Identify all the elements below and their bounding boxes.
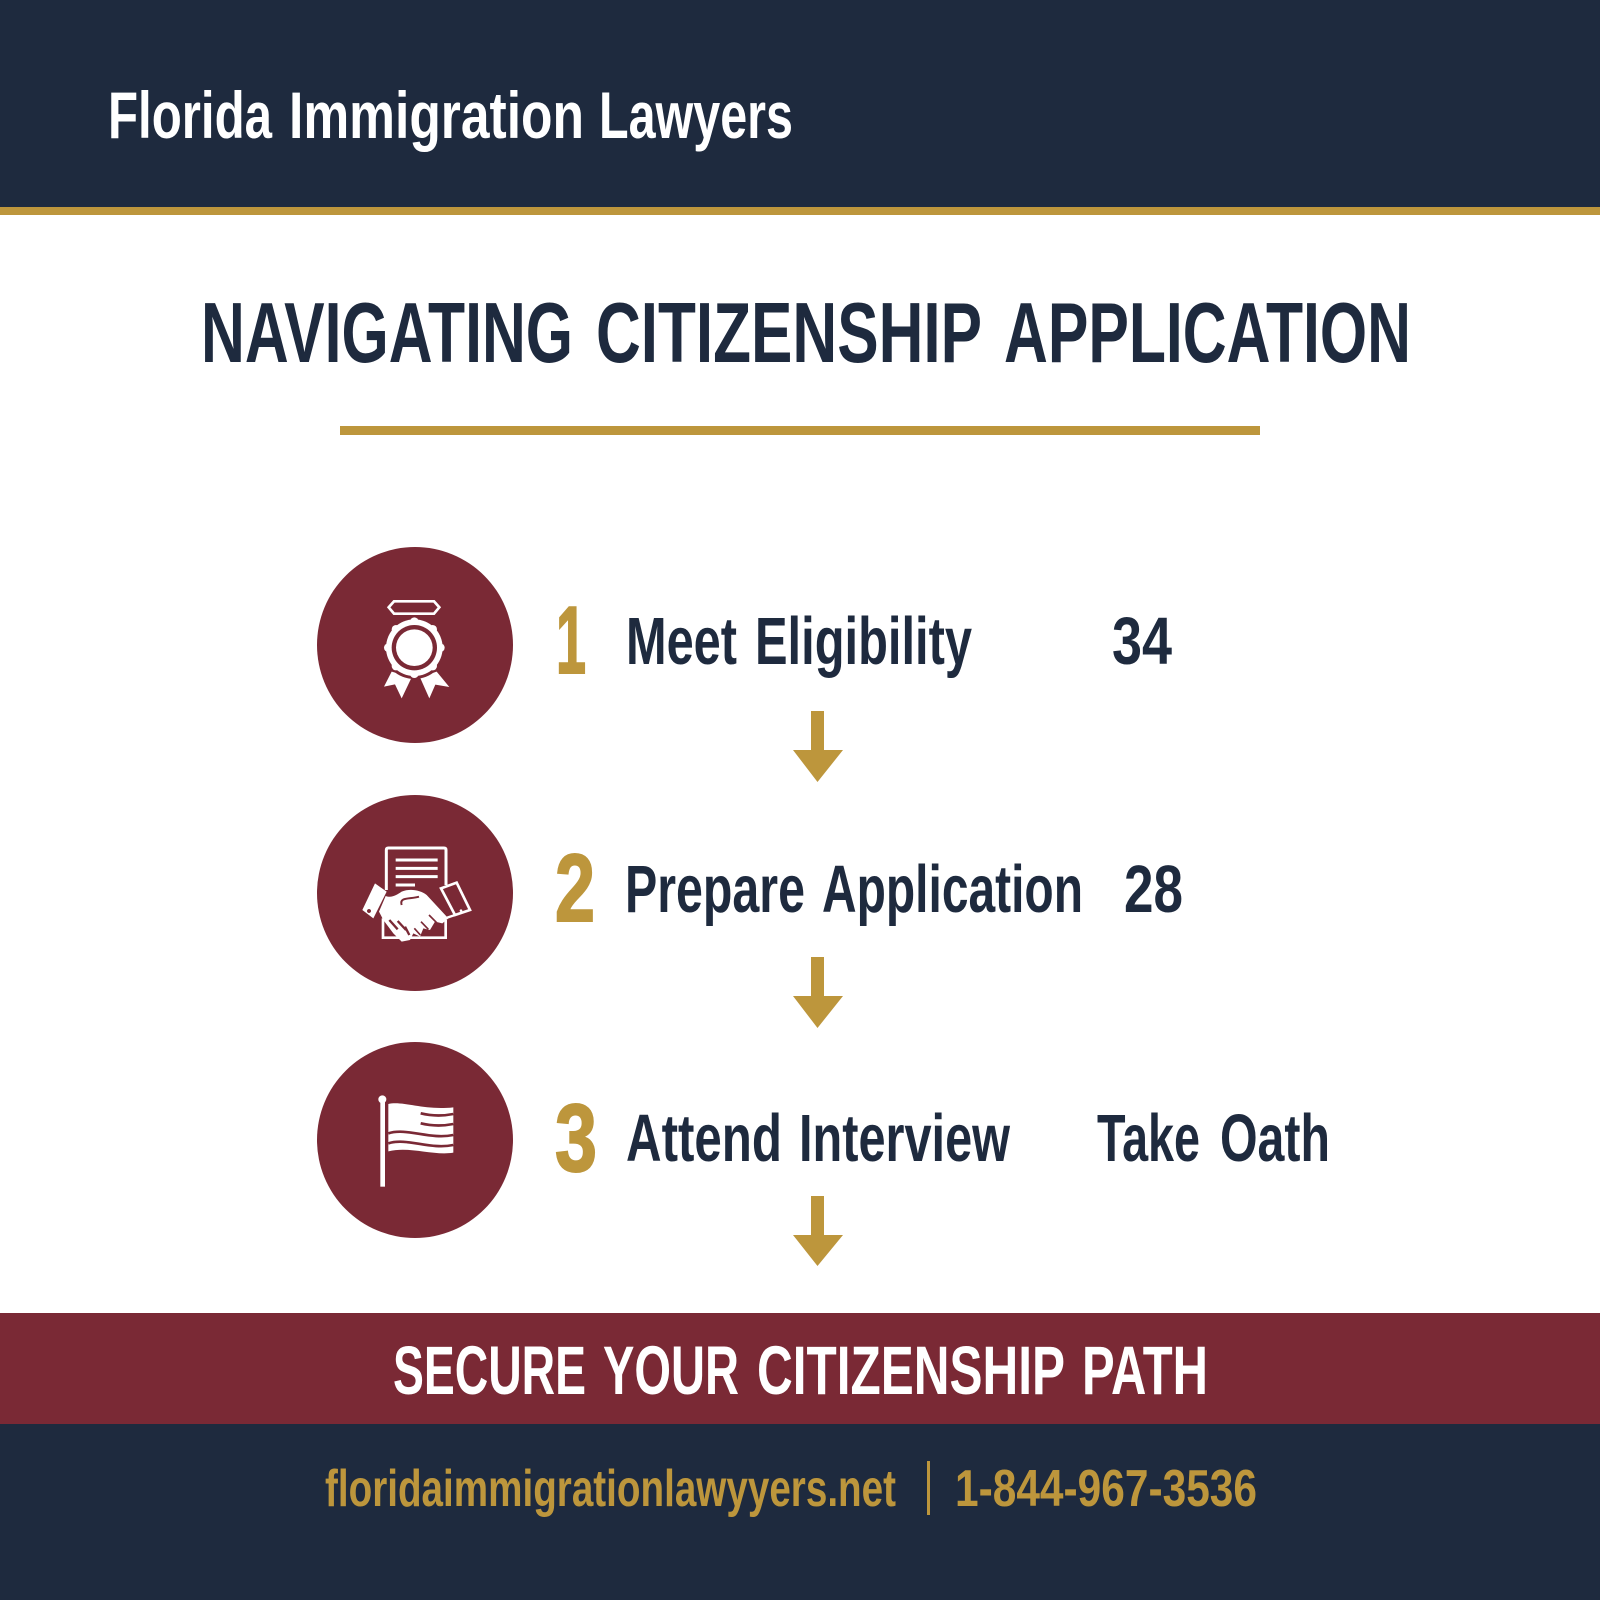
- call to action text: SECURE: [393, 1332, 586, 1409]
- arrow 2: [793, 957, 843, 1028]
- step 3 label: [626, 1101, 1011, 1176]
- arrow 3: [793, 1196, 843, 1266]
- call to action text: CITIZENSHIP: [757, 1332, 1065, 1409]
- main title: NAVIGATING: [201, 286, 573, 381]
- step 2 value: 28: [1124, 852, 1183, 927]
- step 3 next label: Oath: [1220, 1101, 1330, 1176]
- main title: CITIZENSHIP: [596, 286, 982, 381]
- step 3 next label: [1097, 1101, 1330, 1176]
- step 1 number: 1: [556, 587, 586, 694]
- call to action text: YOUR: [603, 1332, 739, 1409]
- call to action band: [0, 1313, 1600, 1424]
- brand name: Immigration: [289, 78, 584, 152]
- step 1 label: Meet: [626, 604, 737, 679]
- footer divider: [927, 1461, 930, 1515]
- step 2: [317, 795, 1183, 991]
- header band: [0, 0, 1600, 215]
- phone: 1-844-967-3536: [955, 1460, 1257, 1518]
- step 3 next label: Take: [1097, 1101, 1200, 1176]
- brand name: Lawyers: [599, 78, 793, 152]
- step 2 number: 2: [555, 835, 595, 942]
- step 1 label: [626, 604, 972, 679]
- website: floridaimmigrationlawyyers.net: [325, 1460, 896, 1518]
- step 2 label: Application: [822, 852, 1083, 927]
- step 1 icon: medal: [317, 547, 513, 743]
- step 2 label: Prepare: [625, 852, 805, 927]
- step 2 icon: handshake and document: [317, 795, 513, 991]
- call to action text: [393, 1332, 1208, 1409]
- step 3: [317, 1042, 1330, 1238]
- footer band: [0, 1424, 1600, 1600]
- step 3 label: Attend: [626, 1101, 782, 1176]
- step 3 number: 3: [555, 1085, 597, 1192]
- main title: [201, 286, 1411, 381]
- brand name: [108, 78, 793, 152]
- step 2 label: [625, 852, 1083, 927]
- arrow 1: [793, 711, 843, 782]
- title underline: [340, 426, 1260, 435]
- main title: APPLICATION: [1004, 286, 1411, 381]
- brand name: Florida: [108, 78, 273, 152]
- step 3 label: Interview: [799, 1101, 1011, 1176]
- step 1: [317, 547, 1172, 743]
- step 3 icon: flag: [317, 1042, 513, 1238]
- step 1 value: 34: [1112, 604, 1172, 679]
- call to action text: PATH: [1082, 1332, 1208, 1409]
- step 1 label: Eligibility: [755, 604, 972, 679]
